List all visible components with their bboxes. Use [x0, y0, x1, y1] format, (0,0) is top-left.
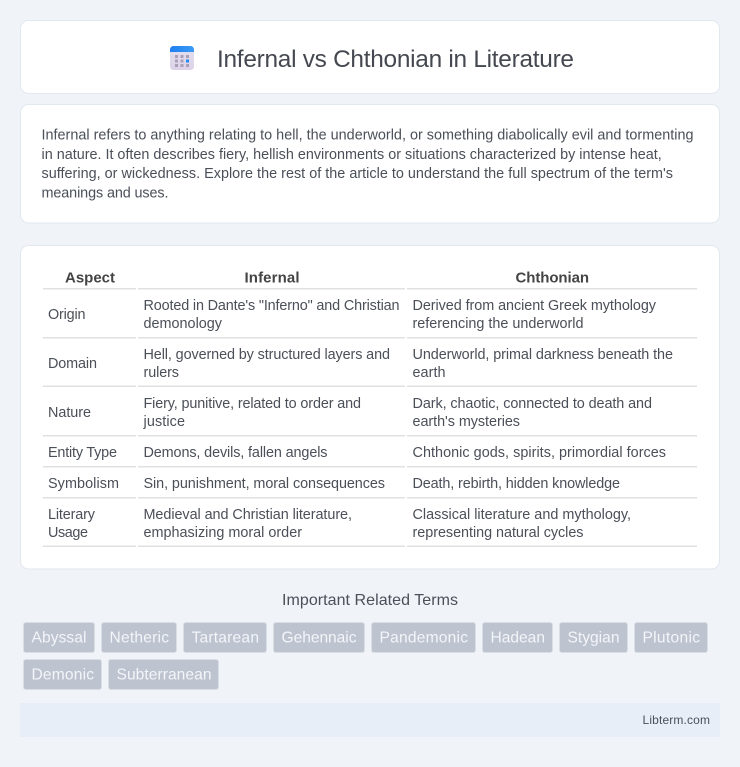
table header: Aspect: [65, 270, 115, 287]
table row: symbolism: Symbolism: [48, 476, 119, 492]
tag: Pandemonic: Pandemonic: [380, 630, 468, 647]
table row: origin: Rooted in Dante's "Inferno" and Christian: [144, 298, 400, 314]
text block: definition: meanings and uses.: [42, 186, 168, 202]
table row: origin: [43, 298, 697, 338]
table row: domain: Domain: [48, 356, 97, 372]
tag: Demonic: Demonic: [32, 667, 94, 684]
tag: Netheric: [102, 622, 176, 652]
tag: Pandemonic: [372, 622, 476, 652]
table row: literary usage: representing natural cycles: [412, 525, 584, 541]
table row: symbolism: Sin, punishment, moral consequences: [144, 476, 385, 492]
table row: literary usage: Classical literature and mythology,: [412, 507, 631, 523]
table row: literary usage: Literary: [48, 507, 96, 523]
footer credit: Libterm.com: [642, 713, 710, 727]
text block: definition: [42, 128, 694, 202]
tag: Tartarean: [184, 622, 266, 652]
tag: Gehennaic: [274, 622, 364, 652]
table header: [43, 270, 697, 290]
table row: entity type: Entity Type: [48, 445, 117, 461]
table row: origin: Origin: [48, 307, 86, 323]
tag: Netheric: Netheric: [110, 630, 169, 647]
table row: origin: demonology: [144, 316, 223, 332]
table row: domain: earth: [412, 365, 446, 381]
table row: nature: [43, 396, 697, 436]
table row: entity type: [43, 445, 697, 468]
tag: Plutonic: Plutonic: [642, 630, 700, 647]
table row: domain: [43, 347, 697, 387]
tag: Subterranean: Subterranean: [116, 667, 212, 684]
tag: Plutonic: [634, 622, 708, 652]
table row: origin: referencing the underworld: [412, 316, 584, 332]
heading: related terms: Important Related Terms: [282, 592, 458, 609]
table row: origin: Derived from ancient Greek mythology: [412, 298, 657, 314]
table row: literary usage: Medieval and Christian literature,: [144, 507, 352, 523]
tag: Tartarean: Tartarean: [192, 630, 259, 647]
table row: nature: justice: [142, 414, 185, 430]
tag: Abyssal: Abyssal: [32, 630, 86, 647]
tag: Stygian: Stygian: [568, 630, 620, 647]
icon: calendar: [170, 46, 194, 70]
table row: nature: Nature: [48, 405, 91, 421]
table header: Infernal: [244, 270, 300, 287]
table row: symbolism: Death, rebirth, hidden knowledge: [412, 476, 620, 492]
tag: Stygian: [560, 622, 628, 652]
table row: domain: Underworld, primal darkness beneath the: [412, 347, 673, 363]
table row: domain: rulers: [144, 365, 179, 381]
text block: definition: suffering, or wickedness. Explore the rest of the article to understand the full spectrum of the term's: [42, 166, 673, 182]
title: Infernal vs Chthonian in Literature: [217, 46, 574, 73]
table row: symbolism: [43, 476, 697, 498]
table row: nature: Fiery, punitive, related to order and: [144, 396, 361, 412]
tag: Hadean: Hadean: [490, 630, 545, 647]
tag: Demonic: [24, 660, 102, 690]
tag: Subterranean: [108, 660, 218, 690]
panel: comparison table: [20, 246, 720, 569]
table row: literary usage: emphasizing moral order: [144, 525, 302, 541]
footer: [20, 703, 720, 737]
related term tags: [24, 622, 708, 690]
table row: entity type: Chthonic gods, spirits, primordial forces: [412, 445, 666, 461]
text block: definition: Infernal refers to anything relating to hell, the underworld, or something diabolically evil and tormenting: [42, 128, 694, 144]
text block: definition: in nature. It often describes fiery, hellish environments or situations characterized by intense heat,: [42, 147, 662, 163]
table row: entity type: Demons, devils, fallen angels: [144, 445, 328, 461]
tag: Abyssal: [24, 622, 94, 652]
table row: domain: Hell, governed by structured layers and: [144, 347, 390, 363]
panel: header: [20, 20, 720, 94]
panel: introduction: [20, 104, 720, 223]
table row: nature: earth's mysteries: [412, 414, 520, 430]
table row: literary usage: Usage: [48, 525, 88, 541]
table row: literary usage: [43, 507, 697, 547]
tag: Gehennaic: Gehennaic: [282, 630, 357, 647]
tag: Hadean: [482, 622, 552, 652]
table header: Chthonian: [516, 270, 589, 287]
table row: nature: Dark, chaotic, connected to death and: [412, 396, 652, 412]
